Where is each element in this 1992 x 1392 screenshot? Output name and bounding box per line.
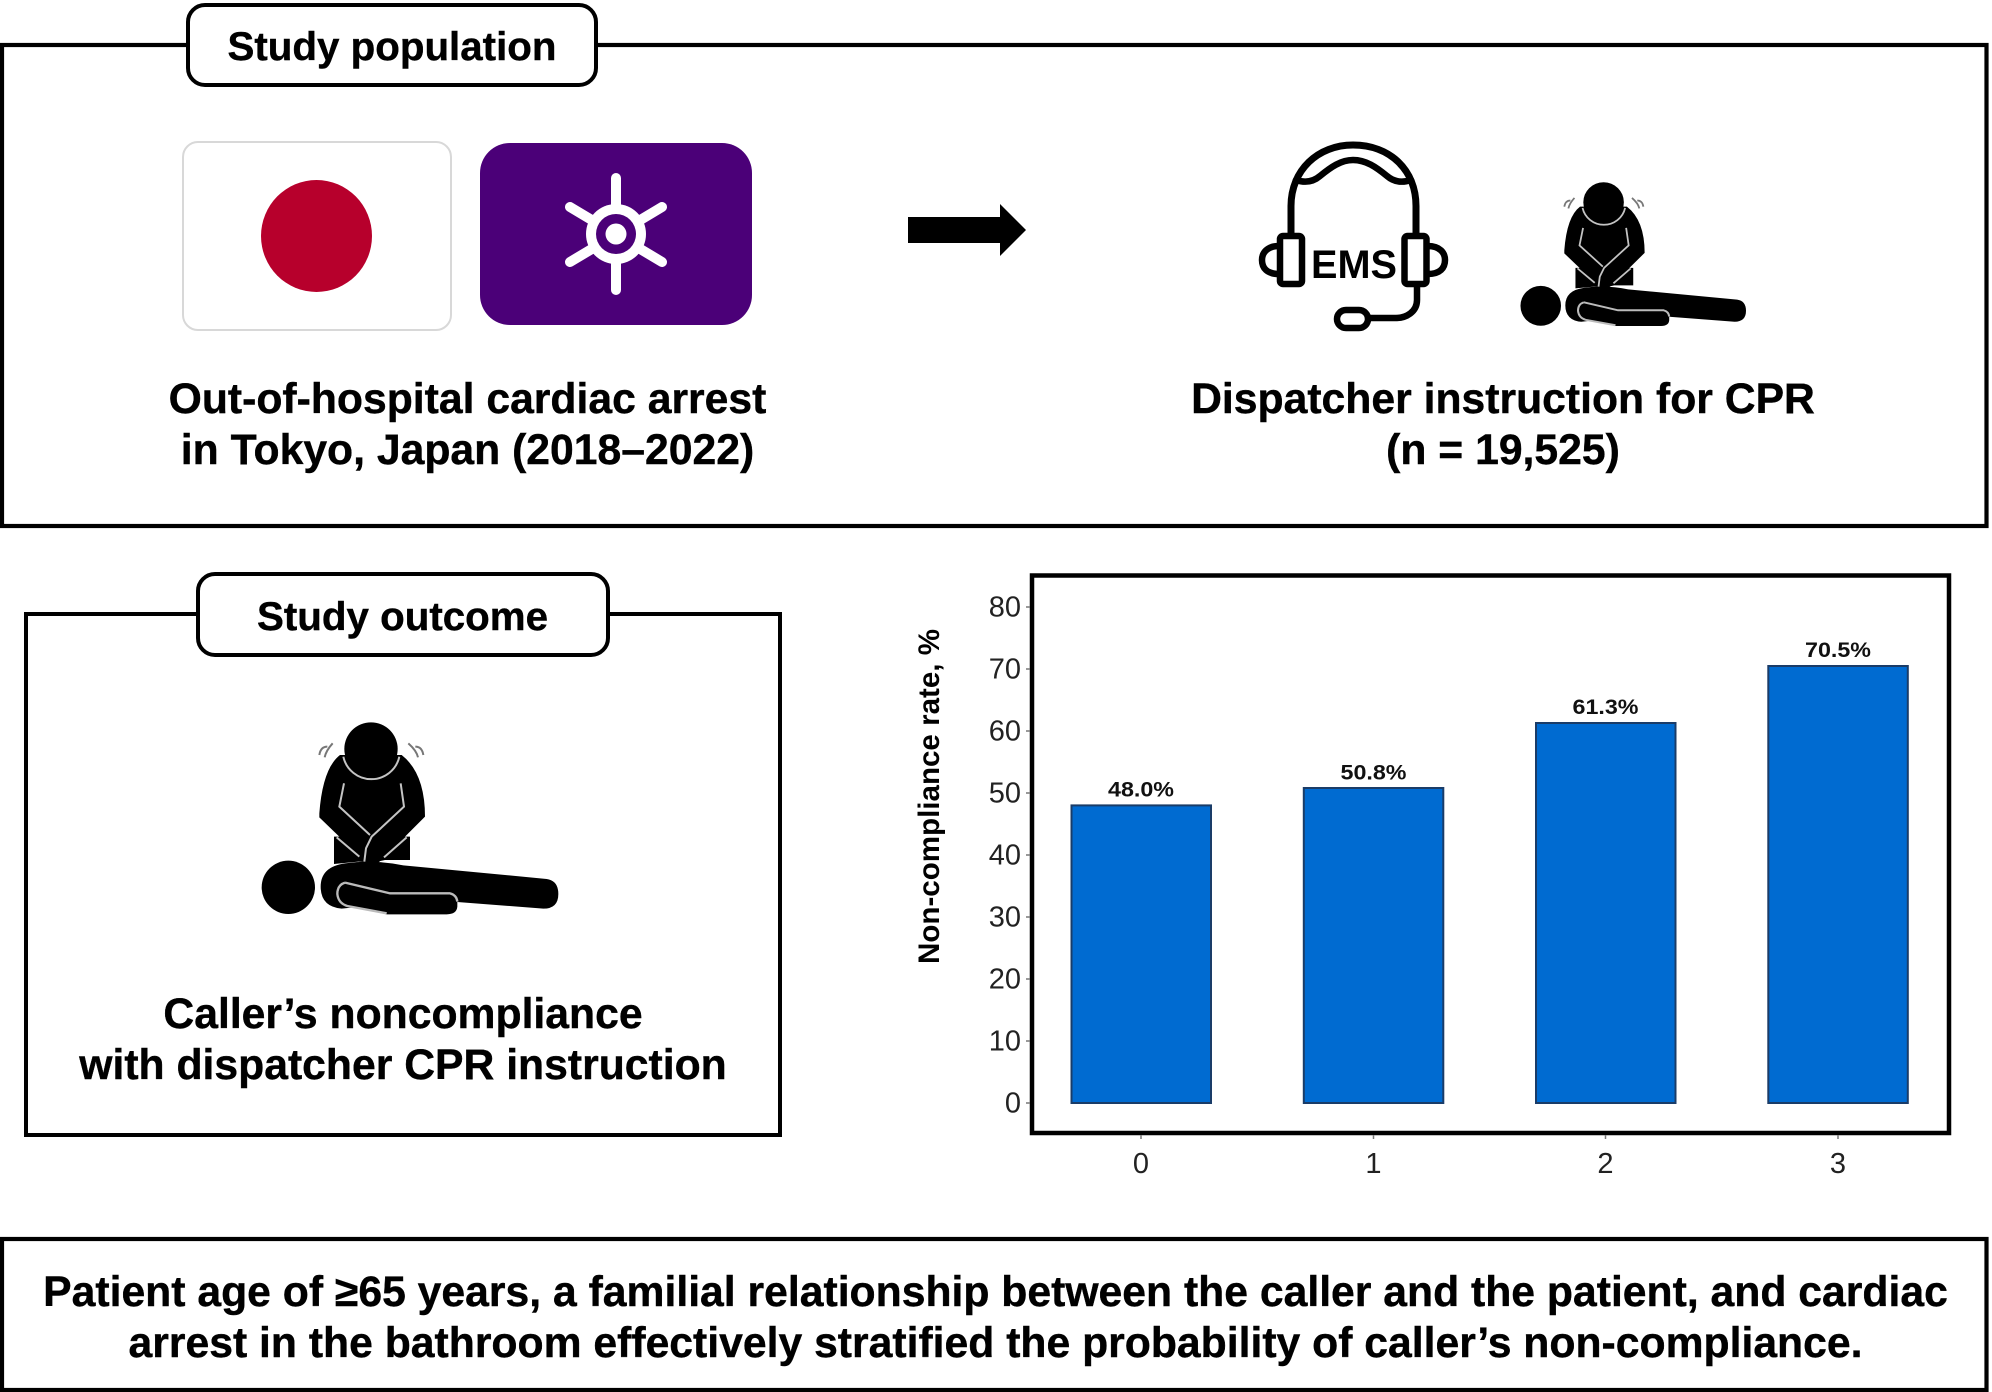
x axis ticks and labels: 2 [1597, 1148, 1614, 1180]
panel: conclusion [2, 1239, 1986, 1390]
y axis ticks and labels [989, 592, 1030, 1120]
text: outcome description: Caller’s noncompliance [163, 990, 643, 1038]
text: dispatcher instruction: Dispatcher instruction for CPR [1191, 375, 1815, 423]
bar chart: non-compliance rate [913, 576, 1949, 1180]
text: conclusion [43, 1268, 1948, 1367]
text: population description: in Tokyo, Japan (2018–2022) [181, 426, 754, 474]
text: outcome description [78, 990, 727, 1089]
icon: EMS headset [1262, 145, 1445, 328]
y axis ticks and labels: 40 [989, 840, 1021, 872]
x axis ticks and labels [1133, 1136, 1846, 1180]
bar value labels: 70.5% [1805, 638, 1871, 662]
y axis ticks and labels: 10 [989, 1026, 1021, 1058]
heading: study population [188, 5, 596, 85]
heading: study outcome: Study outcome [257, 594, 548, 639]
y axis title: Non-compliance rate, % [913, 629, 946, 964]
y axis ticks and labels: 70 [989, 654, 1021, 686]
text: population description: Out-of-hospital cardiac arrest [169, 375, 766, 423]
heading: study population: Study population [227, 24, 557, 69]
text: conclusion: arrest in the bathroom effectively stratified the probability of caller’s non-compliance. [129, 1319, 1862, 1367]
bars [1072, 666, 1908, 1103]
bar value labels: 50.8% [1340, 760, 1406, 784]
y axis ticks and labels: 80 [989, 592, 1021, 624]
bar value labels: 61.3% [1572, 695, 1638, 719]
bar value labels [1108, 638, 1871, 802]
bar value labels: 48.0% [1108, 778, 1174, 802]
icon: person performing CPR (top) [1520, 182, 1746, 326]
heading: study outcome [198, 574, 608, 655]
x axis ticks and labels: 3 [1830, 1148, 1846, 1180]
panel: study population [2, 5, 1986, 526]
y axis ticks and labels: 0 [1005, 1088, 1021, 1120]
icon: person performing CPR (outcome) [262, 722, 558, 914]
text: population description [169, 375, 766, 474]
icon: EMS headset: EMS [1311, 243, 1397, 287]
panel: study outcome [26, 574, 780, 1135]
arrow [908, 204, 1026, 256]
x axis ticks and labels: 1 [1365, 1148, 1382, 1180]
text: conclusion: Patient age of ≥65 years, a familial relationship between the caller and the patient, and cardiac [43, 1268, 1948, 1316]
y axis ticks and labels: 30 [989, 902, 1021, 934]
y axis ticks and labels: 60 [989, 716, 1021, 748]
x axis ticks and labels: 0 [1133, 1148, 1149, 1180]
text: dispatcher instruction [1191, 375, 1815, 474]
y axis ticks and labels: 50 [989, 778, 1021, 810]
text: outcome description: with dispatcher CPR instruction [78, 1041, 727, 1089]
text: dispatcher instruction: (n = 19,525) [1386, 426, 1620, 474]
icon: Tokyo flag [480, 143, 752, 325]
icon: Japan flag [183, 142, 451, 330]
y axis ticks and labels: 20 [989, 964, 1021, 996]
